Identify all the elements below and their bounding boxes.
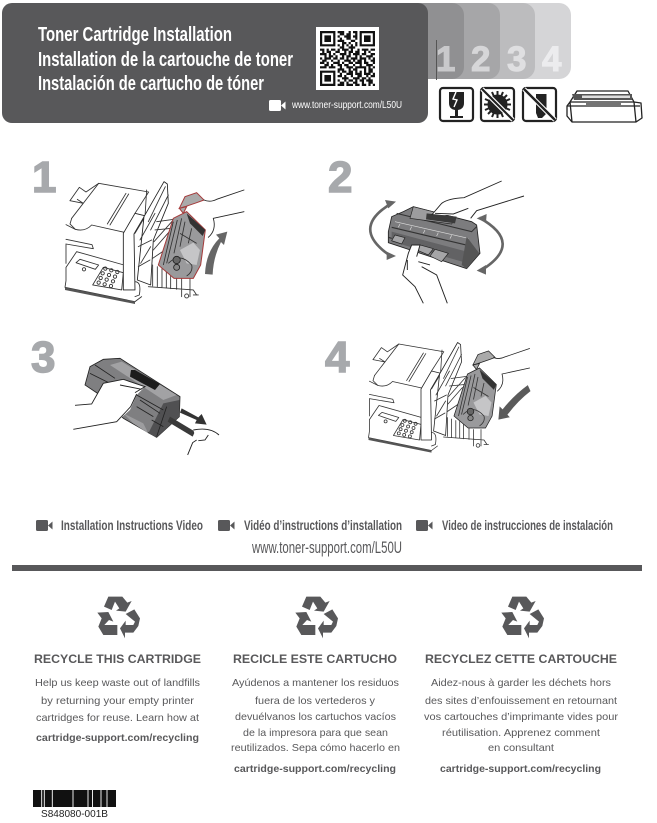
body text: Ayúdenos a mantener los residuos xyxy=(232,677,399,689)
icon: recycle xyxy=(97,597,140,638)
icon: toner cartridge xyxy=(567,91,642,122)
title: Installation de la cartouche de toner xyxy=(38,49,293,71)
body text: de la impresora para que sean xyxy=(243,727,388,739)
step 1 illustration: lift cartridge out of printer xyxy=(65,182,244,304)
icon: recycle xyxy=(295,597,338,638)
barcode xyxy=(33,790,116,820)
body text: devuélvanos los cartuchos vacíos xyxy=(235,711,396,723)
body text: by returning your empty printer xyxy=(41,695,195,707)
body text: fuera de los vertederos y xyxy=(255,695,376,707)
panel: recycle Spanish xyxy=(231,597,400,775)
body text: cartridges for reuse. Learn how at xyxy=(36,712,199,724)
icon: video camera xyxy=(416,520,432,531)
label: video French: Vidéo d’instructions d’installation xyxy=(244,517,402,533)
body text: cartridge-support.com/recycling xyxy=(234,763,396,775)
QR code xyxy=(316,27,379,90)
body text xyxy=(35,677,200,744)
body text xyxy=(424,677,619,775)
header step tabs xyxy=(400,3,571,80)
heading: RECYCLEZ CETTE CARTOUCHE xyxy=(425,652,617,666)
title xyxy=(38,24,293,95)
body text: Help us keep waste out of landfills xyxy=(35,677,200,689)
step 1 number: 1 xyxy=(32,153,56,202)
body text: des sites d’enfouissement en retournant xyxy=(425,695,617,707)
heading: RECICLE ESTE CARTUCHO xyxy=(233,652,397,666)
body text: réutilisation. Apprenez comment xyxy=(442,727,600,739)
icon: fragile glass xyxy=(440,88,473,121)
section divider xyxy=(12,565,642,571)
step 3 number: 3 xyxy=(31,333,55,382)
body text: cartridge-support.com/recycling xyxy=(36,732,199,744)
icon: video camera xyxy=(218,520,234,531)
step 2 illustration: rock cartridge xyxy=(370,181,524,303)
icon: do not stand cartridge xyxy=(523,88,556,121)
panel: recycle French xyxy=(424,597,619,775)
icon: recycle xyxy=(501,597,544,638)
label: video English: Installation Instructions Video xyxy=(61,517,203,533)
header url: www.toner-support.com/L50U xyxy=(291,99,402,111)
body text: en consultant xyxy=(488,742,554,754)
video url: www.toner-support.com/L50U xyxy=(251,538,402,557)
title: Toner Cartridge Installation xyxy=(38,24,232,46)
step 2 number: 2 xyxy=(328,153,352,202)
header step tabs: 1 xyxy=(436,40,455,79)
header panel xyxy=(2,3,428,123)
step 4 number: 4 xyxy=(325,333,350,382)
icon: no light exposure xyxy=(481,88,514,121)
body text xyxy=(231,677,400,775)
video instructions row xyxy=(36,517,613,533)
title: Instalación de cartucho de tóner xyxy=(38,73,264,95)
heading: RECYCLE THIS CARTRIDGE xyxy=(34,652,201,666)
step 3 illustration: pull sealing tape xyxy=(73,358,219,455)
body text: vos cartouches d’imprimante vides pour xyxy=(424,711,619,723)
icon: video camera xyxy=(269,100,286,111)
header step tabs: 4 xyxy=(542,40,562,79)
header step tabs: 2 xyxy=(471,40,490,79)
header step tabs: 3 xyxy=(507,40,526,79)
icon: video camera xyxy=(36,520,52,531)
panel: recycle English xyxy=(34,597,201,744)
body text: cartridge-support.com/recycling xyxy=(440,763,601,775)
body text: Aidez-nous à garder les déchets hors xyxy=(431,677,611,689)
part number: S848080-001B xyxy=(41,808,108,820)
step 4 illustration: reinsert cartridge xyxy=(368,342,530,453)
body text: reutilizados. Sepa cómo hacerlo en xyxy=(231,742,400,754)
